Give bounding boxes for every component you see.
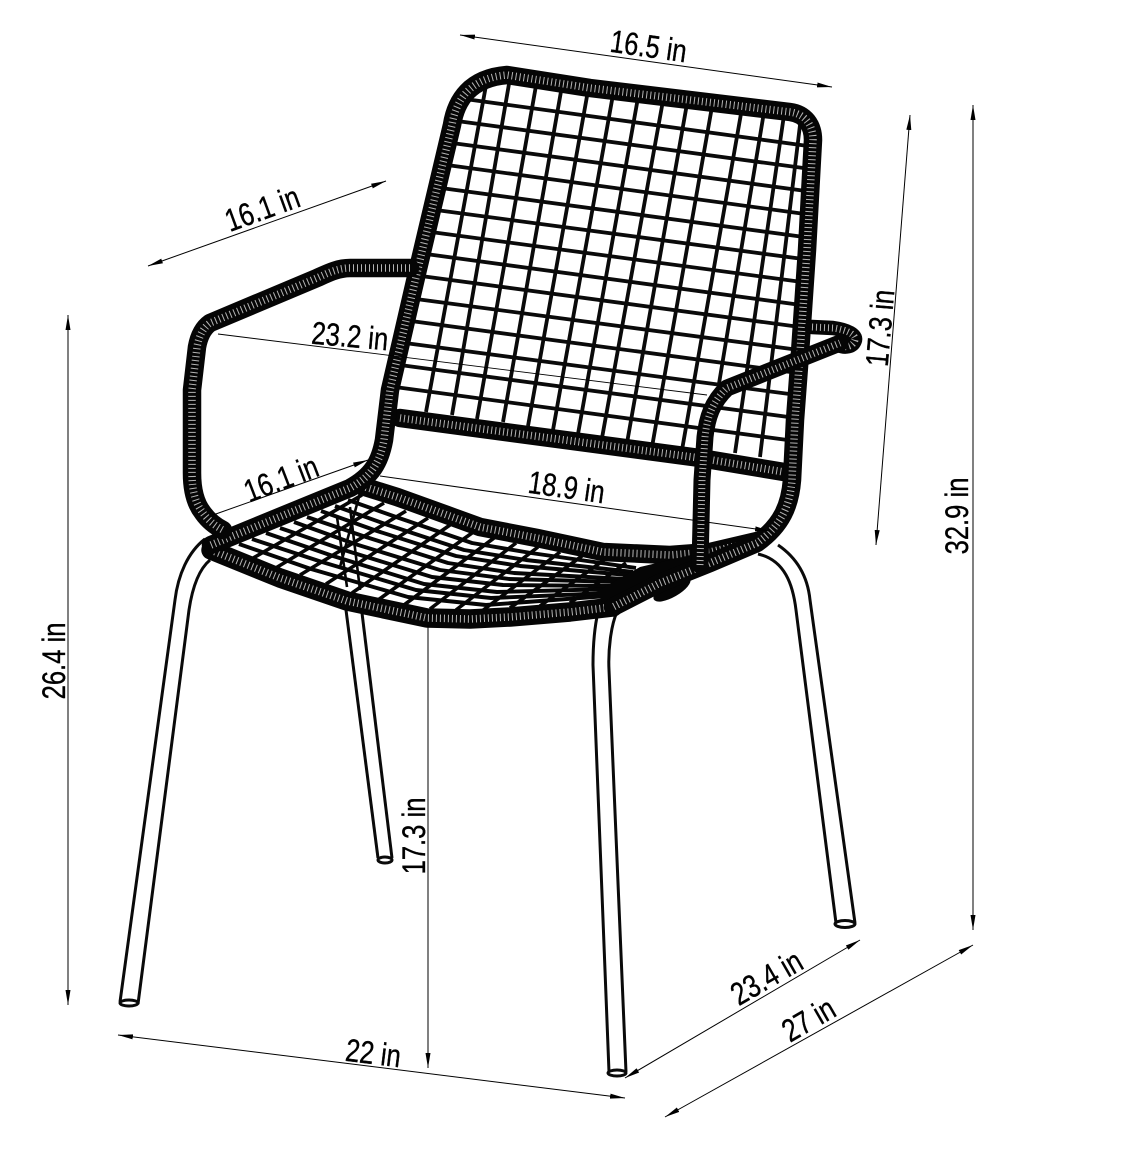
dimension: overall depth 27 in: [665, 945, 973, 1117]
dimension: seat depth 16.1 in: [213, 449, 368, 515]
dimension: leg depth 23.4 in: 23.4 in: [725, 944, 809, 1013]
back bottom rail: [400, 418, 790, 473]
legs: [120, 539, 855, 1076]
dimension: seat width 18.9 in: 18.9 in: [526, 465, 607, 511]
knob: [650, 572, 694, 606]
dimension: top width 16.5 in: [460, 24, 832, 87]
dimension: top width 16.5 in: 16.5 in: [608, 24, 689, 70]
dimension: seat depth 16.1 in: 16.1 in: [239, 449, 324, 510]
back mesh grid: [395, 78, 808, 457]
dimension: leg depth 23.4 in: [625, 940, 860, 1078]
dimension: back height 17.3 in: [860, 115, 910, 545]
dimension: seat width 18.9 in: [380, 465, 770, 531]
dimension: overall arm width 23.2 in: 23.2 in: [310, 316, 390, 358]
back frame with seat side rails: [211, 75, 813, 607]
dimension: front width 22 in: 22 in: [344, 1033, 403, 1075]
dimension: back height 17.3 in: 17.3 in: [860, 288, 902, 368]
dimension: arm height 26.4 in: 26.4 in: [37, 623, 73, 699]
left armrest: [192, 268, 410, 530]
dark wedge at seat corner: [596, 554, 695, 613]
dimension: seat height 17.3 in: 17.3 in: [397, 798, 433, 874]
seat mesh: [214, 485, 757, 618]
leg: front left: [120, 539, 210, 1006]
dimension: overall arm width 23.2 in: [218, 316, 707, 395]
dimension: arm depth 16.1 in: [148, 180, 386, 266]
seat rear and front bands: [211, 486, 757, 619]
dimension: overall depth 27 in: 27 in: [776, 991, 842, 1050]
leg: back left: [346, 610, 392, 863]
dimension: front width 22 in: [118, 1033, 625, 1098]
leg: back right: [758, 545, 855, 928]
leg: front right: [593, 612, 626, 1076]
dimension: total height 32.9 in: 32.9 in: [940, 478, 976, 554]
dimension: arm depth 16.1 in: 16.1 in: [220, 180, 305, 239]
right armrest: [700, 327, 855, 565]
